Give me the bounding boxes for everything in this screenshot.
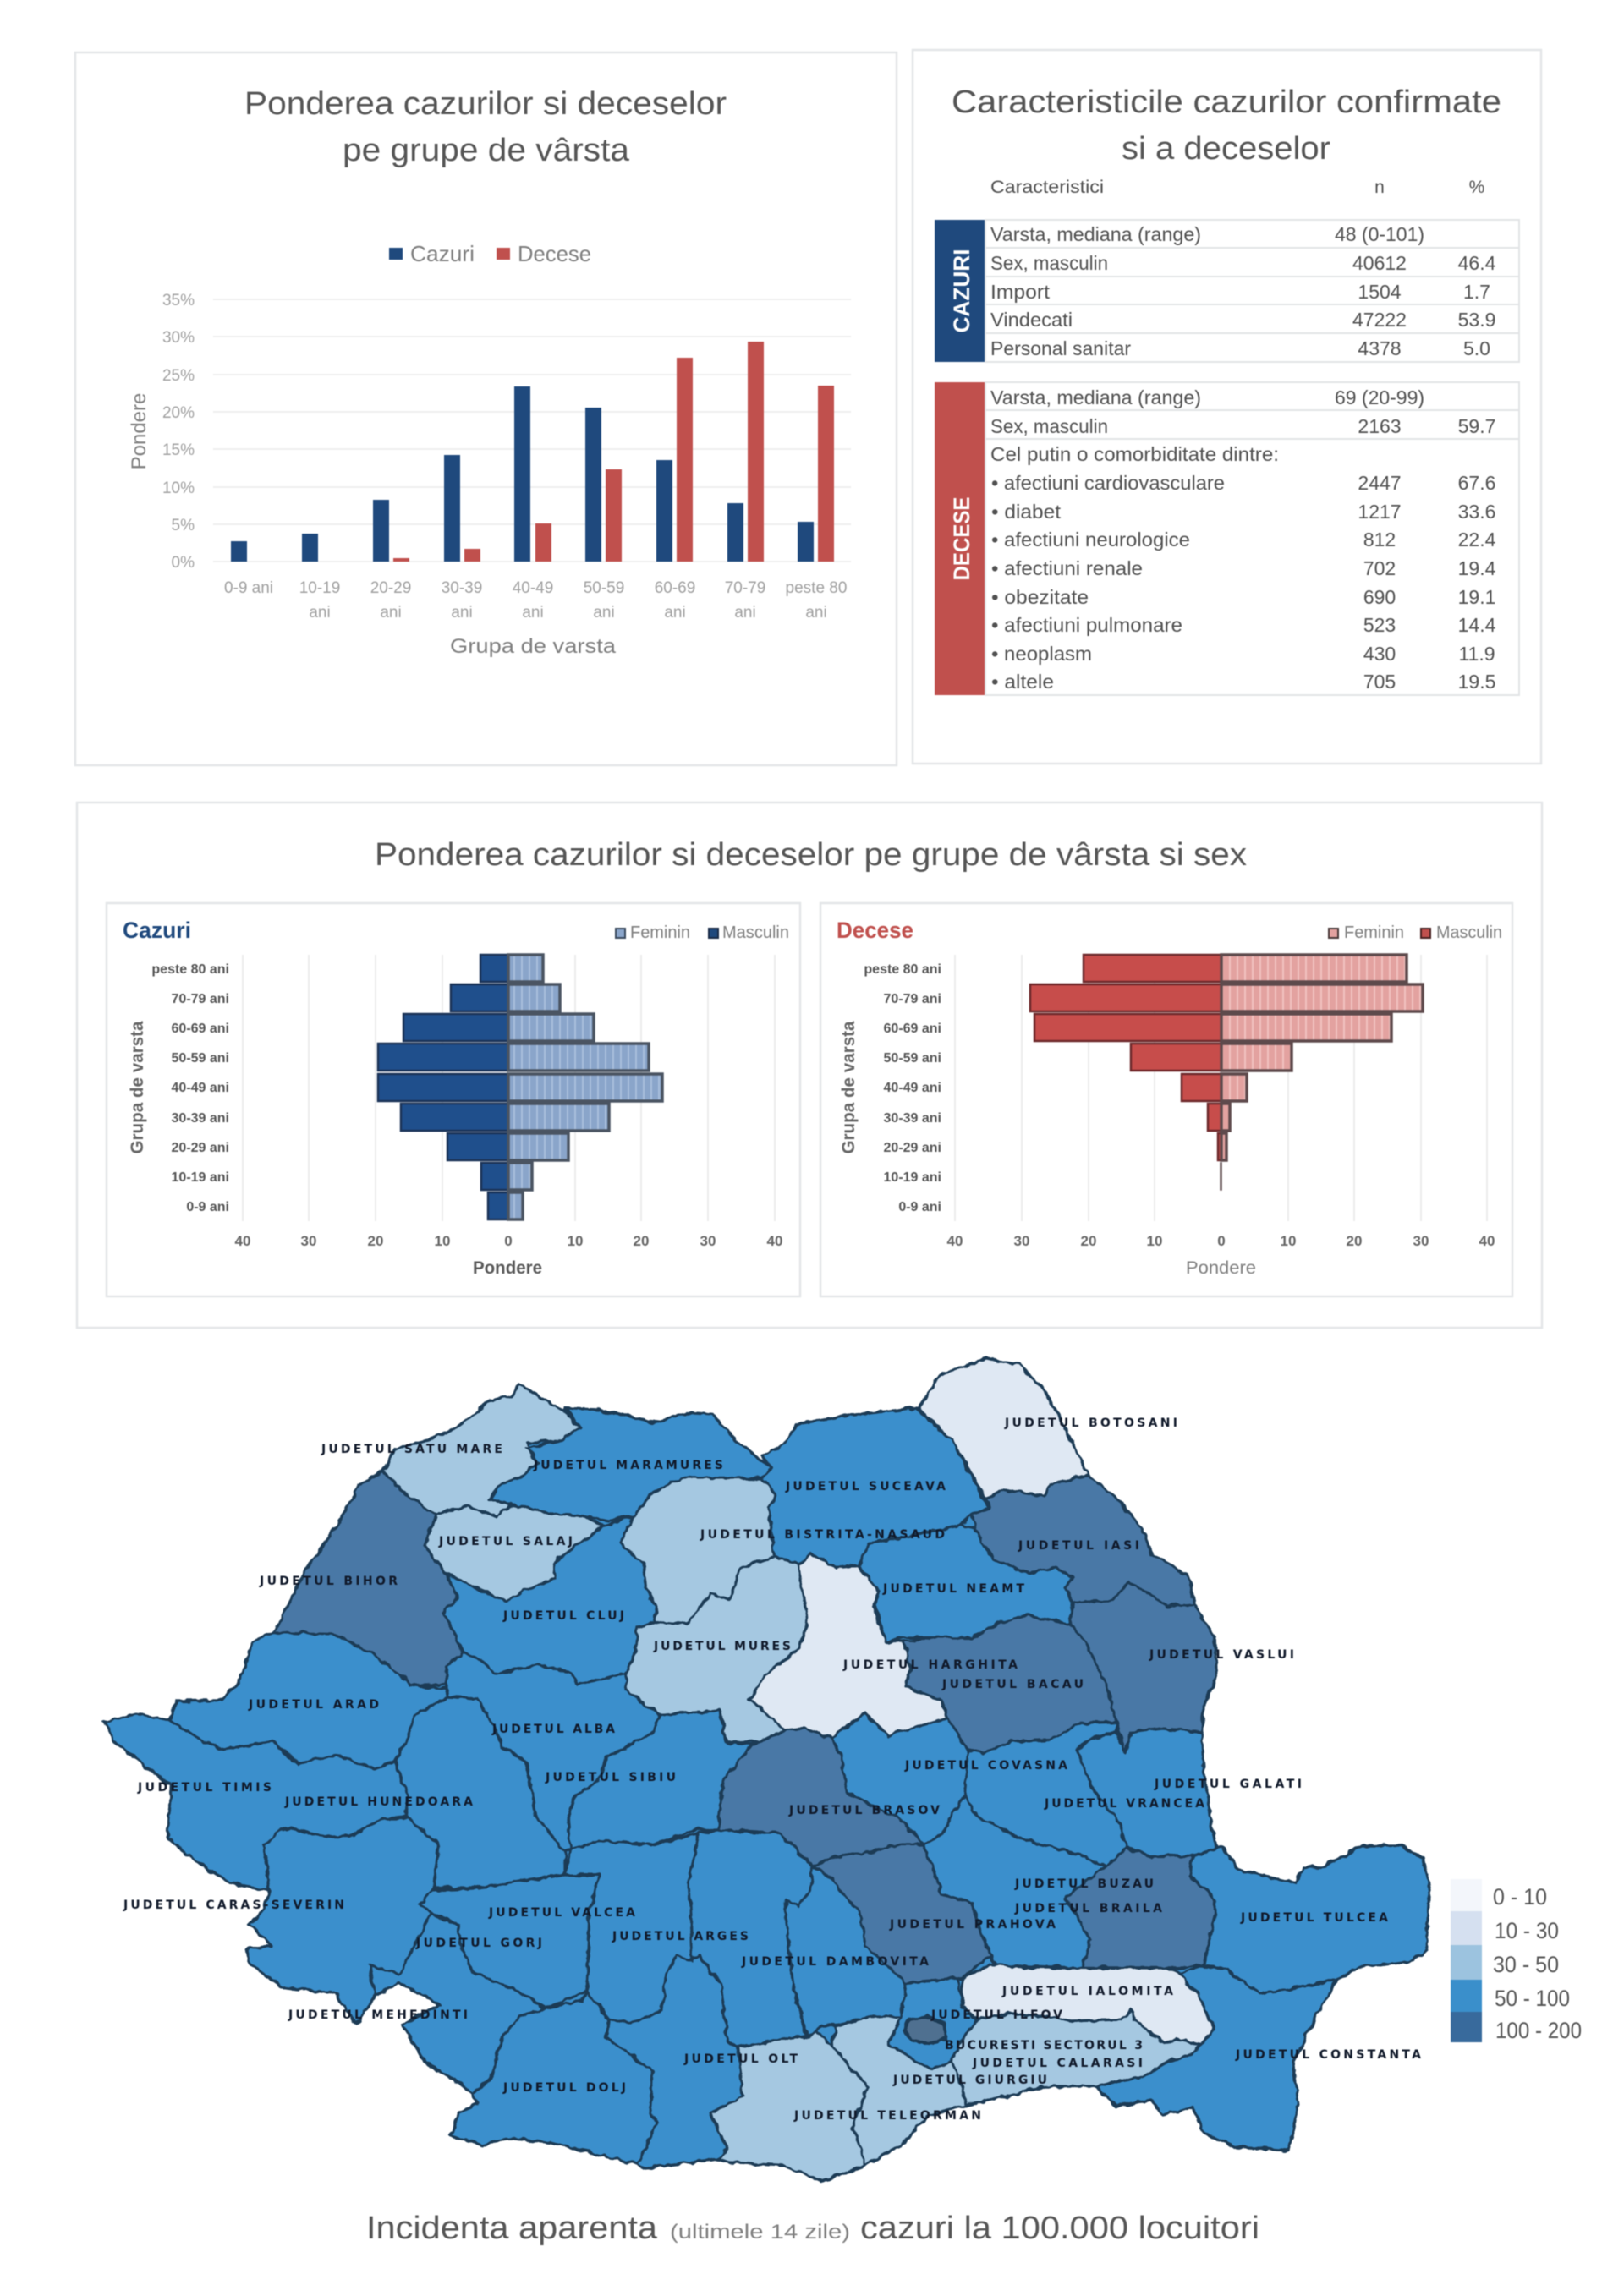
age labels: 60-69 ani [884, 1022, 941, 1036]
x axis category labels: 0-9 ani [224, 579, 273, 597]
decese rows: 22.4 [1458, 529, 1496, 551]
county labels: JUDETUL GIURGIU [892, 2074, 1047, 2087]
cazuri rows [985, 220, 1519, 362]
county labels: JUDETUL TELEORMAN [793, 2109, 981, 2123]
decese rows: 19.1 [1458, 586, 1495, 608]
heading: table title: Caracteristicile cazurilor confirmate [952, 85, 1501, 120]
decese rows: 523 [1363, 614, 1396, 636]
county: Gorj [420, 1875, 599, 2008]
age labels: 0-9 ani [898, 1200, 941, 1214]
y axis tick labels: 35% [162, 292, 195, 310]
cazuri rows: 40612 [1352, 252, 1407, 274]
decese rows: 430 [1363, 643, 1396, 665]
x axis category labels: ani [734, 604, 756, 622]
county: Covasna [831, 1713, 968, 1845]
section: cazuri [935, 220, 1519, 362]
decese legend: Masculin [1436, 923, 1502, 942]
legend: cazuri and decese: Decese [518, 241, 591, 266]
county labels: JUDETUL BOTOSANI [1004, 1417, 1177, 1430]
country silhouette [104, 1359, 1429, 2181]
x axis numbers: 30 [700, 1233, 716, 1249]
decese rows: 702 [1363, 557, 1396, 579]
county labels: JUDETUL VASLUI [1149, 1648, 1294, 1662]
county: Salaj [425, 1504, 604, 1603]
cazuri side label [935, 220, 985, 362]
x axis category labels: ani [309, 604, 331, 622]
map caption: cazuri la 100.000 locuitori [860, 2211, 1259, 2246]
county: Arges [689, 1830, 813, 2047]
county labels: JUDETUL OLT [683, 2052, 798, 2066]
x axis numbers: 20 [634, 1233, 649, 1249]
x axis category labels: 20-29 [370, 579, 411, 597]
y axis tick labels: 15% [162, 441, 195, 459]
county labels: JUDETUL CARAS-SEVERIN [123, 1899, 344, 1912]
county: Neamt [858, 1526, 1073, 1641]
cazuri legend: Masculin [722, 923, 789, 942]
age labels: 40-49 ani [172, 1081, 229, 1095]
decese rows: 705 [1363, 671, 1396, 693]
y axis title: Grupa de varsta [839, 1021, 859, 1153]
heading: table title: si a deceselor [1122, 131, 1330, 167]
county: Satu Mare [383, 1384, 581, 1516]
x axis category labels: 40-49 [513, 579, 553, 597]
decese rows: • obezitate [991, 586, 1089, 608]
decese rows: 59.7 [1458, 415, 1495, 437]
map legend: 10 - 30 [1495, 1918, 1559, 1943]
x axis category labels: 60-69 [655, 579, 695, 597]
cazuri rows: 1.7 [1463, 281, 1490, 303]
map caption: (ultimele 14 zile) [670, 2221, 850, 2244]
county: Suceava [762, 1408, 990, 1568]
bars: feminin [508, 955, 662, 1219]
x axis category labels: ani [805, 604, 827, 622]
county: Bucuresti [905, 2016, 946, 2045]
county labels: JUDETUL MURES [653, 1640, 791, 1653]
county labels: JUDETUL MARAMURES [533, 1459, 723, 1472]
age labels: 20-29 ani [172, 1141, 229, 1155]
county labels: JUDETUL TULCEA [1240, 1911, 1388, 1925]
county labels: JUDETUL BRASOV [788, 1804, 940, 1817]
age labels [864, 962, 941, 1214]
age labels: 0-9 ani [186, 1200, 229, 1214]
bars: cazuri [231, 386, 814, 562]
county labels: JUDETUL COVASNA [904, 1759, 1067, 1773]
county labels: JUDETUL ALBA [491, 1723, 615, 1736]
x axis category labels: peste 80 [786, 579, 847, 597]
decese rows: • afectiuni cardiovasculare [991, 472, 1225, 494]
cazuri rows: 47222 [1352, 309, 1407, 331]
county: Tulcea [1190, 1845, 1429, 1993]
x axis category labels: ani [593, 604, 615, 622]
county: Botosani [919, 1359, 1088, 1498]
county labels: JUDETUL PRAHOVA [889, 1918, 1056, 1932]
x axis category labels: 30-39 [442, 579, 482, 597]
county: Arad [169, 1632, 448, 1769]
county: Prahova [813, 1845, 990, 1983]
county: Alba [447, 1653, 660, 1851]
age labels: 30-39 ani [172, 1111, 229, 1126]
decese rows: 2163 [1358, 415, 1402, 437]
county labels: JUDETUL ARAD [248, 1698, 379, 1712]
decese rows: 69 (20-99) [1335, 386, 1424, 408]
county: Valcea [565, 1833, 699, 2024]
x axis category labels: ani [522, 604, 544, 622]
cazuri rows: 1504 [1358, 281, 1402, 303]
y axis title: Grupa de varsta [128, 1021, 147, 1153]
map legend: 30 - 50 [1493, 1952, 1559, 1977]
x axis title: Pondere [473, 1258, 542, 1278]
decese subtitle: Decese [837, 918, 914, 943]
decese rows: 19.4 [1458, 557, 1496, 579]
county labels: JUDETUL BISTRITA-NASAUD [700, 1528, 945, 1542]
county: Olt [606, 1955, 743, 2168]
age labels: 10-19 ani [884, 1170, 941, 1185]
county: Buzau [924, 1795, 1106, 1968]
cazuri rows: 46.4 [1458, 252, 1496, 274]
age labels: 50-59 ani [172, 1051, 229, 1066]
county: Mures [626, 1557, 808, 1743]
y axis tick labels: 10% [162, 479, 195, 497]
decese rows: • altele [991, 671, 1054, 693]
county: Vaslui [1070, 1581, 1216, 1753]
age labels: peste 80 ani [151, 962, 229, 977]
table header: Caracteristici [990, 178, 1104, 197]
age labels: 20-29 ani [884, 1141, 941, 1155]
age labels [151, 962, 229, 1214]
county labels: JUDETUL VRANCEA [1044, 1797, 1204, 1811]
heading: bar chart title: Ponderea cazurilor si deceselor [244, 86, 727, 122]
map legend [1451, 1879, 1582, 2043]
age labels: 30-39 ani [884, 1111, 941, 1126]
county: Dolj [451, 1992, 657, 2164]
county labels: JUDETUL BIHOR [259, 1575, 398, 1588]
county labels: JUDETUL SIBIU [545, 1771, 676, 1784]
county labels: JUDETUL CONSTANTA [1235, 2048, 1421, 2062]
county: Dambovita [786, 1866, 906, 2037]
county labels: JUDETUL VALCEA [488, 1906, 635, 1920]
x axis category labels: ani [380, 604, 402, 622]
decese rows: 14.4 [1458, 614, 1496, 636]
x axis numbers: 30 [301, 1233, 316, 1249]
county: Teleorman [710, 2029, 868, 2181]
legend: cazuri and decese [389, 241, 591, 266]
county: Vrancea [965, 1722, 1127, 1866]
decese rows: Sex, masculin [990, 415, 1108, 437]
decese rows: • afectiuni renale [991, 557, 1143, 579]
cazuri legend [616, 923, 789, 942]
county: Brasov [718, 1729, 924, 1866]
y axis title: Pondere [128, 393, 151, 469]
x axis numbers: 20 [1347, 1233, 1362, 1249]
cazuri rows: 53.9 [1458, 309, 1495, 331]
x axis numbers: 10 [1281, 1233, 1296, 1249]
decese rows: 1217 [1358, 501, 1402, 523]
x axis category labels: 70-79 [725, 579, 765, 597]
county labels: JUDETUL HUNEDOARA [284, 1795, 473, 1809]
decese rows: 2447 [1358, 472, 1402, 494]
cazuri side label: CAZURI [949, 249, 974, 333]
bars: decese [393, 342, 834, 562]
county shapes [104, 1359, 1429, 2181]
county labels: JUDETUL ILFOV [930, 2008, 1062, 2022]
county: Ilfov [888, 1975, 978, 2069]
county labels: JUDETUL GALATI [1154, 1778, 1302, 1791]
county labels: JUDETUL SALAJ [438, 1535, 573, 1548]
decese rows: 812 [1363, 529, 1396, 551]
cazuri rows: 4378 [1358, 337, 1402, 359]
cazuri rows: Import [990, 281, 1051, 303]
decese rows: 11.9 [1458, 643, 1495, 665]
map: incidence by county [104, 1359, 1429, 2181]
county: Galati [1078, 1729, 1216, 1856]
chart: cazuri pyramid [107, 903, 800, 1296]
cazuri rows: 48 (0-101) [1335, 223, 1424, 245]
panel: age group bar chart [75, 52, 897, 765]
cazuri rows: Vindecati [990, 309, 1073, 331]
age labels: 70-79 ani [884, 992, 941, 1006]
county: Mehedinti [339, 1913, 546, 2092]
x axis numbers: 40 [767, 1233, 782, 1249]
x axis numbers: 10 [435, 1233, 450, 1249]
decese legend: Feminin [1344, 923, 1404, 942]
county: Harghita [749, 1553, 947, 1738]
x axis numbers: 40 [947, 1233, 963, 1249]
county labels: JUDETUL CALARASI [972, 2057, 1143, 2070]
decese side label [935, 382, 985, 695]
cazuri subtitle: Cazuri [123, 918, 191, 943]
x axis numbers: 20 [368, 1233, 383, 1249]
county labels: JUDETUL SUCEAVA [785, 1480, 946, 1493]
section: decese [935, 382, 1519, 695]
county: Constanta [1095, 1966, 1336, 2151]
x axis title: Pondere [1186, 1258, 1256, 1278]
county labels: JUDETUL NEAMT [882, 1582, 1024, 1596]
x axis numbers: 20 [1081, 1233, 1096, 1249]
county labels: JUDETUL BRAILA [1014, 1902, 1162, 1915]
chart: decese pyramid [820, 903, 1512, 1296]
decese rows [985, 382, 1519, 695]
x axis category labels [224, 579, 847, 622]
county: Bistrita-Nasaud [621, 1478, 776, 1624]
county: Calarasi [950, 2010, 1201, 2106]
map legend: 50 - 100 [1495, 1986, 1570, 2011]
county: Iasi [973, 1475, 1195, 1606]
age labels: 10-19 ani [172, 1170, 229, 1185]
x axis numbers: 40 [1479, 1233, 1495, 1249]
heading: bar chart title [244, 86, 727, 168]
map caption: Incidenta aparenta [366, 2211, 658, 2246]
cazuri rows: Varsta, mediana (range) [990, 223, 1201, 245]
county: Cluj [444, 1516, 656, 1685]
table header: % [1469, 178, 1484, 197]
county labels: JUDETUL ARGES [612, 1930, 749, 1943]
county: Braila [1065, 1848, 1216, 1968]
decese rows: Cel putin o comorbiditate dintre: [990, 443, 1279, 465]
cazuri legend: Feminin [630, 923, 690, 942]
y axis tick labels: 20% [162, 404, 195, 422]
county labels: BUCURESTI SECTORUL 3 [945, 2039, 1143, 2052]
county labels: JUDETUL CLUJ [502, 1609, 624, 1623]
panel: age and sex pyramids [77, 803, 1542, 1328]
age labels: 40-49 ani [884, 1081, 941, 1095]
y axis tick labels [162, 292, 195, 572]
table header: n [1374, 178, 1385, 197]
county labels: JUDETUL DAMBOVITA [741, 1955, 929, 1969]
bars: masculin [378, 955, 508, 1219]
county labels [123, 1417, 1421, 2123]
bars: feminin [1221, 955, 1423, 1190]
x axis numbers: 30 [1413, 1233, 1429, 1249]
x axis category labels: 10-19 [299, 579, 340, 597]
x axis category labels: 50-59 [584, 579, 624, 597]
cazuri rows: Sex, masculin [990, 252, 1108, 274]
decese rows: 33.6 [1458, 501, 1495, 523]
heading: bar chart title: pe grupe de vârsta [343, 133, 630, 168]
county: Hunedoara [395, 1697, 565, 1888]
x axis numbers: 0 [504, 1233, 513, 1249]
y axis tick labels: 0% [172, 554, 195, 572]
county labels: JUDETUL TIMIS [137, 1781, 272, 1795]
county labels: JUDETUL HARGHITA [842, 1658, 1018, 1672]
bars: masculin [1030, 955, 1221, 1160]
age labels: 60-69 ani [172, 1022, 229, 1036]
decese rows: 67.6 [1458, 472, 1495, 494]
legend: cazuri and decese: Cazuri [410, 241, 475, 266]
decese rows: Varsta, mediana (range) [990, 386, 1201, 408]
y axis tick labels: 25% [162, 367, 195, 385]
county: Ialomita [963, 1964, 1214, 2045]
heading: pyramids title: Ponderea cazurilor si deceselor pe grupe de vârsta si sex [375, 837, 1247, 873]
county labels: JUDETUL GORJ [415, 1937, 542, 1950]
map legend: 100 - 200 [1495, 2018, 1582, 2043]
county labels: JUDETUL IALOMITA [1001, 1985, 1173, 1998]
decese rows: • neoplasm [991, 643, 1092, 665]
x axis numbers: 10 [568, 1233, 583, 1249]
x axis numbers [947, 1233, 1495, 1249]
age labels: 50-59 ani [884, 1051, 941, 1066]
x axis category labels: ani [451, 604, 473, 622]
decese legend [1329, 923, 1502, 942]
county labels: JUDETUL BACAU [941, 1678, 1084, 1691]
decese rows: 690 [1363, 586, 1396, 608]
x axis numbers: 40 [235, 1233, 250, 1249]
county labels: JUDETUL BUZAU [1014, 1877, 1154, 1891]
x axis category labels: ani [664, 604, 686, 622]
decese rows: • afectiuni neurologice [991, 529, 1190, 551]
county: Caras-Severin [247, 1818, 439, 2024]
x axis numbers: 30 [1014, 1233, 1029, 1249]
map caption [366, 2211, 1259, 2246]
county: Giurgiu [831, 2016, 965, 2166]
county: Bacau [903, 1615, 1116, 1753]
decese rows: • afectiuni pulmonare [991, 614, 1182, 636]
panel: characteristics table [913, 50, 1541, 764]
county labels: JUDETUL IASI [1018, 1539, 1139, 1553]
x axis numbers: 10 [1147, 1233, 1162, 1249]
county labels: JUDETUL MEHEDINTI [288, 2008, 468, 2022]
county: Sibiu [568, 1711, 752, 1849]
county: Bihor [274, 1471, 464, 1685]
y axis tick labels: 5% [172, 517, 195, 534]
age labels: peste 80 ani [864, 962, 941, 977]
table header [990, 178, 1484, 197]
decese rows: • diabet [991, 501, 1062, 523]
x axis numbers [235, 1233, 782, 1249]
county labels: JUDETUL SATU MARE [321, 1443, 502, 1456]
county labels: JUDETUL DOLJ [502, 2081, 626, 2095]
age labels: 70-79 ani [172, 992, 229, 1006]
decese rows: 19.5 [1458, 671, 1495, 693]
y axis tick labels: 30% [162, 329, 195, 347]
county: Maramures [490, 1408, 771, 1521]
cazuri rows: Personal sanitar [990, 337, 1131, 359]
decese side label: DECESE [949, 497, 974, 580]
map legend: 0 - 10 [1493, 1884, 1547, 1910]
county: Timis [104, 1713, 408, 1891]
heading: table title [952, 85, 1501, 167]
cazuri rows: 5.0 [1463, 337, 1490, 359]
x axis title: Grupa de varsta [450, 635, 617, 658]
x axis numbers: 0 [1217, 1233, 1226, 1249]
